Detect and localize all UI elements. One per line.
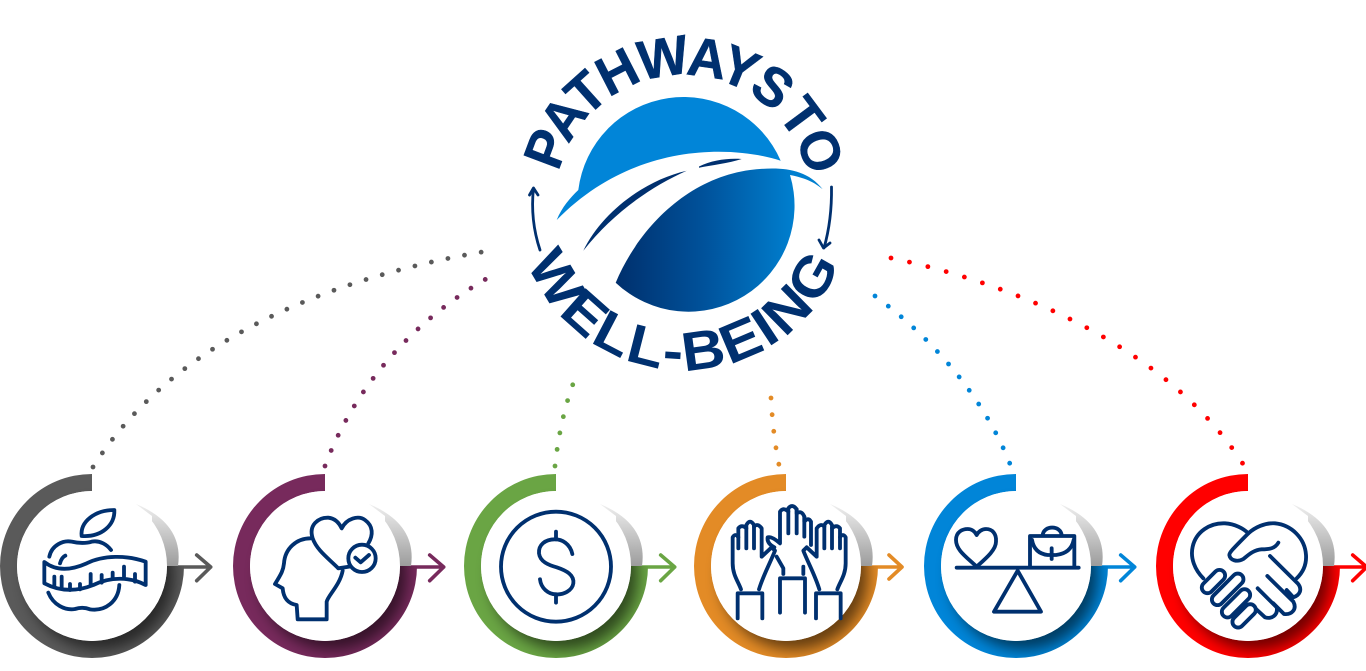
arrow: right cycle (819, 187, 832, 248)
dotted connector: grey (93, 252, 482, 467)
icon: apple and measuring tape (44, 510, 146, 610)
logo globe lower half (616, 168, 823, 312)
road dash long (583, 171, 687, 251)
ring (924, 474, 1135, 658)
heading: Pathways to: PATHWAYS TO (524, 34, 840, 170)
ring (233, 474, 444, 658)
dotted connector: red (891, 258, 1243, 464)
road dash short (699, 159, 742, 168)
pathway: mental health (233, 474, 444, 658)
arrow: left cycle (530, 188, 540, 250)
logo: Pathways to Well-Being (524, 34, 840, 371)
dotted connector: green (555, 384, 573, 466)
pathway: physical health (0, 474, 211, 658)
pathway: financial health (464, 474, 675, 658)
pathway: social connection (1156, 474, 1366, 658)
icon: scale with heart and briefcase (956, 528, 1079, 612)
dotted connector: orange (771, 398, 779, 465)
icon: head with heart and check (275, 518, 376, 619)
dotted connector: purple (325, 279, 486, 466)
logo globe upper half (557, 97, 781, 220)
icon: handshake heart (1192, 523, 1306, 630)
icon: dollar coin (501, 512, 611, 622)
dotted connector: blue (875, 296, 1010, 464)
ring (0, 474, 211, 658)
heading: Well-Being: WELL-BEING (531, 244, 834, 371)
icon: raised hands (733, 506, 846, 618)
ring (464, 474, 675, 658)
pathway: work-life balance (924, 474, 1135, 658)
ring (694, 474, 902, 658)
ring (1156, 474, 1366, 658)
pathway: community (694, 474, 902, 658)
